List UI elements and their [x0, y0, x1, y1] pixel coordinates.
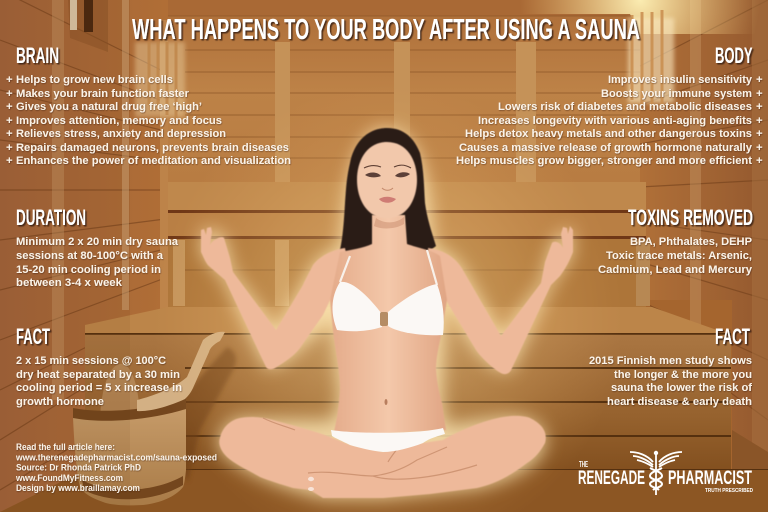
- fact text: cooling period = 5 x increase in: [16, 382, 182, 394]
- foot and calf creases: [263, 418, 477, 479]
- brain benefit list: Helps to grow new brain cells: [16, 74, 173, 86]
- duration text: Minimum 2 x 20 min dry sauna: [16, 236, 179, 248]
- brain benefit list: +: [6, 115, 13, 127]
- dark edge shading: [0, 0, 130, 512]
- brain benefit list: +: [6, 101, 13, 113]
- body benefit list: Boosts your immune system: [601, 88, 752, 100]
- eyes and lips: [364, 165, 411, 228]
- fact text: 2 x 15 min sessions @ 100°C: [16, 355, 166, 367]
- fact text: [16, 355, 182, 408]
- body benefit list: +: [756, 128, 763, 140]
- source credits: Source: Dr Rhonda Patrick PhD: [16, 462, 141, 474]
- duration text: sessions at 80-100°C with a: [16, 250, 164, 262]
- body benefit list: +: [756, 88, 763, 100]
- bucket: [73, 332, 236, 505]
- silhouette glow: [201, 128, 573, 498]
- body benefit list: +: [756, 142, 763, 154]
- brain benefit list: Enhances the power of meditation and visualization: [16, 155, 291, 167]
- left wall planks: [0, 0, 168, 512]
- panel: brain: [6, 43, 291, 167]
- duration text: [16, 236, 179, 289]
- logo: the renegade pharmacist: [578, 451, 753, 495]
- heading: brain: BRAIN: [16, 43, 59, 68]
- heading: duration: DURATION: [16, 205, 86, 230]
- lower bench: [0, 307, 768, 512]
- right arm and hand: [428, 226, 573, 374]
- brain benefit list: Relieves stress, anxiety and depression: [16, 128, 226, 140]
- woman figure in lotus pose: [201, 128, 573, 498]
- toes: [308, 477, 314, 491]
- ceiling light: [520, 0, 768, 34]
- heading: fact: FACT: [16, 324, 50, 349]
- duration text: 15-20 min cooling period in: [16, 264, 161, 276]
- toxins text: BPA, Phthalates, DEHP: [630, 236, 752, 248]
- left arm and hand: [201, 227, 350, 369]
- body benefit list: +: [756, 115, 763, 127]
- body benefit list: +: [756, 155, 763, 167]
- toxins text: Toxic trace metals: Arsenic,: [606, 250, 752, 262]
- body benefit list: +: [756, 101, 763, 113]
- fact text: growth hormone: [16, 396, 104, 408]
- brain benefit list: Gives you a natural drug free ‘high’: [16, 101, 202, 113]
- bikini bottom: [331, 428, 445, 452]
- crossed legs: [219, 416, 546, 498]
- toxins text: [598, 236, 753, 276]
- body benefit list: Causes a massive release of growth hormone naturally: [459, 142, 753, 154]
- face: [357, 142, 417, 218]
- navel: [384, 399, 388, 405]
- brain benefit list: Improves attention, memory and focus: [16, 115, 222, 127]
- upper bench and lower wall: [168, 182, 650, 308]
- panel: fact left: [16, 324, 182, 408]
- bikini top: [332, 250, 444, 335]
- panel: toxins removed: [598, 205, 753, 276]
- logo: the renegade pharmacist: RENEGADE: [578, 468, 645, 489]
- back wall: [165, 0, 640, 182]
- fact text: [589, 355, 752, 408]
- source credits: Read the full article here:: [16, 442, 115, 453]
- source credits: www.FoundMyFitness.com: [15, 473, 123, 484]
- fact text: sauna the lower the risk of: [611, 382, 752, 394]
- brain benefit list: +: [6, 155, 13, 167]
- logo: the renegade pharmacist: TRUTH PRESCRIBED: [705, 488, 753, 494]
- body benefit list: Helps detox heavy metals and other dangerous toxins: [465, 128, 752, 140]
- brain benefit list: Repairs damaged neurons, prevents brain diseases: [16, 142, 289, 154]
- source credits: [15, 442, 217, 494]
- fact text: 2015 Finnish men study shows: [589, 355, 752, 367]
- source credits: www.therenegadepharmacist.com/sauna-exposed: [15, 452, 217, 464]
- body benefit list: +: [756, 74, 763, 86]
- panel: duration: [16, 205, 179, 289]
- brain benefit list: +: [6, 142, 13, 154]
- toxins text: Cadmium, Lead and Mercury: [598, 264, 753, 276]
- source credits: Design by www.braillamay.com: [16, 483, 140, 494]
- body benefit list: Lowers risk of diabetes and metabolic diseases: [498, 101, 752, 113]
- fact text: heart disease & early death: [607, 396, 752, 408]
- left window light: [135, 42, 185, 118]
- brain benefit list: +: [6, 88, 13, 100]
- panel: body: [456, 43, 763, 167]
- body benefit list: Improves insulin sensitivity: [608, 74, 753, 86]
- fact text: the longer & the more you: [614, 369, 752, 381]
- body benefit list: Helps muscles grow bigger, stronger and more efficient: [456, 155, 752, 167]
- brain benefit list: +: [6, 74, 13, 86]
- icon: caduceus: [630, 451, 682, 495]
- body benefit list: Increases longevity with various anti-aging benefits: [478, 115, 752, 127]
- brain benefit list: +: [6, 128, 13, 140]
- back hair: [340, 128, 436, 256]
- panel: fact right: [589, 324, 752, 408]
- brain benefit list: [6, 74, 291, 167]
- torso: [330, 215, 447, 436]
- right wall planks: [640, 0, 768, 512]
- brain benefit list: Makes your brain function faster: [16, 88, 190, 100]
- logo: the renegade pharmacist: THE: [579, 460, 588, 469]
- fact text: dry heat separated by a 30 min: [16, 369, 180, 381]
- right window light: [628, 10, 674, 110]
- duration text: between 3-4 x week: [16, 277, 123, 289]
- body benefit list: [456, 74, 763, 167]
